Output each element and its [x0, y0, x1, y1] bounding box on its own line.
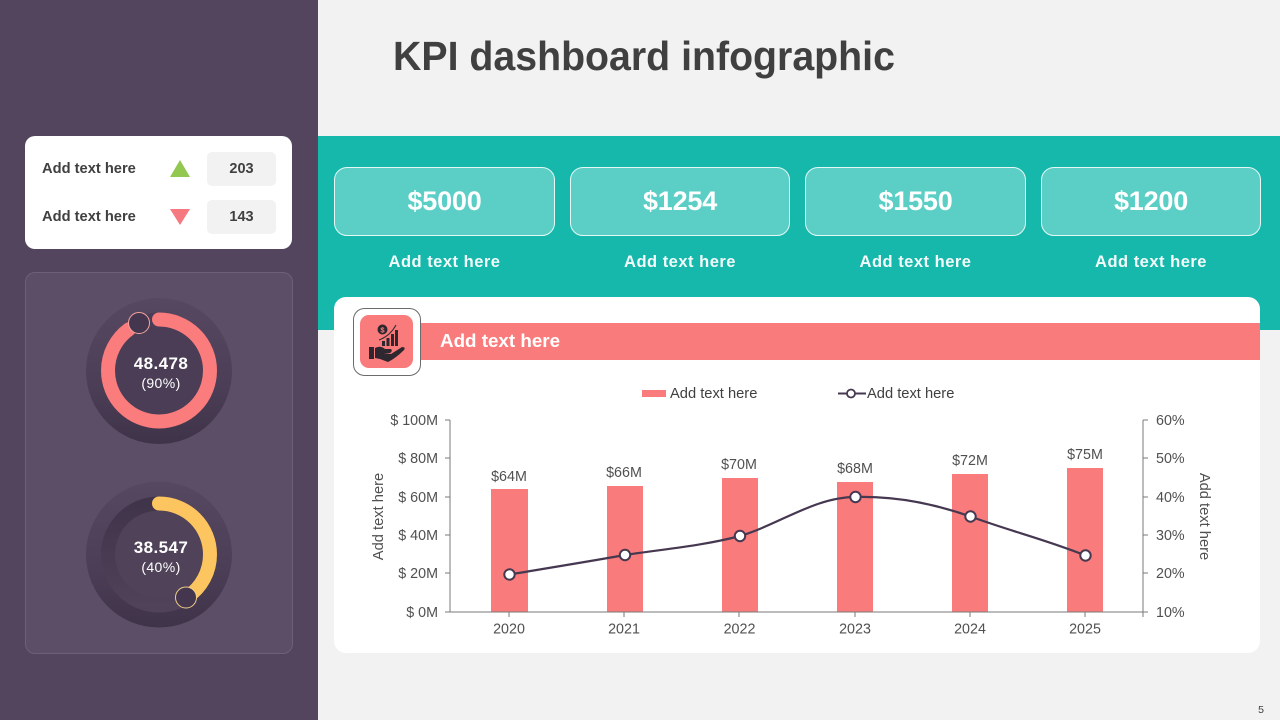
label: down metric: Add text here [42, 209, 136, 225]
KPI caption 1: Add text here [389, 253, 500, 271]
legend: Add text here [670, 386, 757, 402]
KPI caption 3: Add text here [860, 253, 971, 271]
bar value labels: $66M [606, 465, 642, 481]
axis titles: Add text here [371, 473, 387, 560]
bar value labels: $70M [721, 457, 757, 473]
chart header band [421, 323, 1260, 360]
gauge: 90 percent: 48.478 [134, 354, 188, 373]
left sidebar background [0, 0, 318, 720]
left axis labels: $ 40M [398, 528, 438, 544]
axis titles: Add text here [1196, 473, 1212, 560]
icon: hand holding growth chart [353, 308, 421, 376]
KPI card 2 [570, 167, 790, 236]
year labels: 2025 [1069, 622, 1101, 638]
gauge: 90 percent [86, 308, 232, 444]
right axis labels: 20% [1156, 566, 1185, 582]
legend [642, 386, 954, 402]
KPI card 3: $1550 [878, 186, 953, 216]
bar value labels [491, 447, 1103, 485]
value: up metric: 203 [229, 161, 254, 177]
right axis labels: 60% [1156, 413, 1185, 429]
gauge: 40 percent: (40%) [141, 559, 181, 575]
bars [491, 468, 1103, 612]
year labels: 2020 [493, 622, 525, 638]
chart header band: Add text here [440, 330, 560, 351]
axis titles [371, 473, 1212, 560]
bar value labels: $75M [1067, 447, 1103, 463]
title: KPI dashboard infographic [393, 33, 895, 79]
bar value labels: $64M [491, 469, 527, 485]
right axis labels: 50% [1156, 451, 1185, 467]
gauge: 40 percent: 38.547 [134, 538, 188, 557]
value: down metric: 143 [229, 209, 254, 225]
left axis labels: $ 20M [398, 566, 438, 582]
rate line [504, 492, 1091, 580]
panel: gauges [25, 272, 293, 654]
left axis labels: $ 60M [398, 490, 438, 506]
KPI card 1: $5000 [407, 186, 482, 216]
panel: up/down summary [25, 136, 292, 249]
year labels: 2023 [839, 622, 871, 638]
icon: hand holding growth chart: $ [380, 326, 385, 334]
panel: chart card [334, 297, 1260, 653]
KPI card 4: $1200 [1114, 186, 1188, 216]
left axis labels [390, 413, 438, 621]
icon: up triangle [170, 160, 190, 177]
icon: down triangle [170, 209, 190, 225]
year labels [493, 622, 1101, 638]
bar value labels: $72M [952, 453, 988, 469]
teal band [318, 136, 1280, 330]
page number: 5 [1258, 704, 1264, 716]
KPI caption 4: Add text here [1095, 253, 1207, 271]
label: up metric: Add text here [42, 161, 136, 177]
KPI card 4 [1041, 167, 1261, 236]
gauge: 90 percent: (90%) [141, 375, 181, 391]
right axis labels: 30% [1156, 528, 1185, 544]
right axis labels: 40% [1156, 490, 1185, 506]
left axis labels: $ 0M [406, 605, 438, 621]
KPI card 1 [334, 167, 555, 236]
legend: Add text here [867, 386, 954, 402]
right axis labels: 10% [1156, 605, 1185, 621]
value: up metric [207, 152, 276, 186]
bar value labels: $68M [837, 461, 873, 477]
axes [445, 420, 1148, 617]
year labels: 2021 [608, 622, 640, 638]
year labels: 2022 [724, 622, 755, 638]
gauge: 40 percent [86, 491, 232, 628]
right axis labels [1156, 413, 1185, 621]
KPI card 2: $1254 [643, 186, 717, 216]
year labels: 2024 [954, 622, 986, 638]
KPI card 3 [805, 167, 1026, 236]
left axis labels: $ 100M [390, 413, 438, 429]
chart: revenue bars and rate line [371, 386, 1212, 638]
KPI caption 2: Add text here [624, 253, 736, 271]
value: down metric [207, 200, 276, 234]
left axis labels: $ 80M [398, 451, 438, 467]
